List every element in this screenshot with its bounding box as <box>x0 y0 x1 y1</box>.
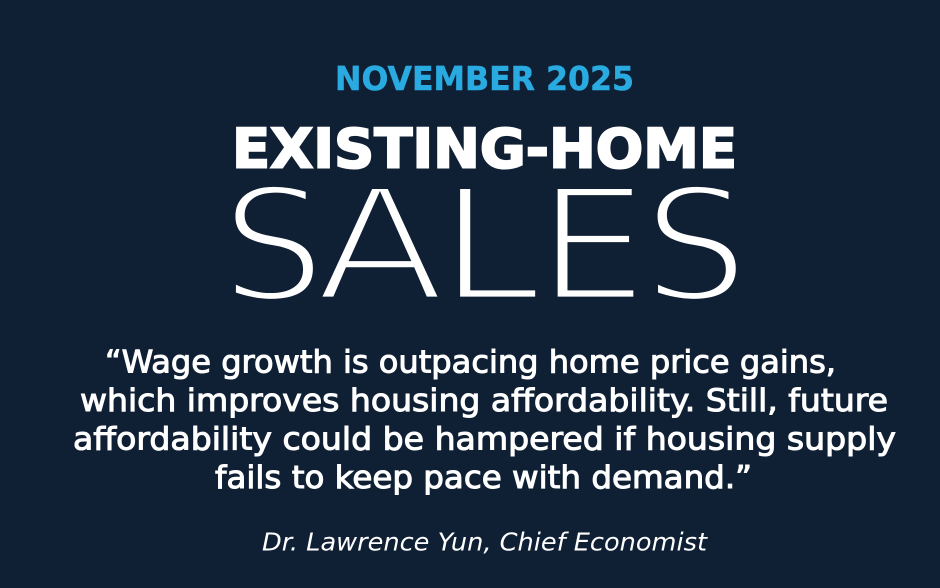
title: sales <box>221 155 749 338</box>
title: sales: A <box>315 155 445 338</box>
title: sales: S <box>643 155 749 338</box>
title: sales: S <box>221 155 326 337</box>
quote text: which improves housing affordability. Still, future <box>80 383 888 419</box>
quote text: fails to keep pace with demand.” <box>215 460 752 496</box>
attribution: Dr. Lawrence Yun, Chief Economist <box>262 528 708 556</box>
title: sales: E <box>536 155 648 337</box>
title: existing-home: EXISTING-HOME <box>232 118 737 180</box>
quote text: affordability could be hampered if housing supply <box>73 422 896 458</box>
date heading: NOVEMBER 2025 <box>335 59 634 98</box>
quote text <box>73 344 896 496</box>
quote text: “Wage growth is outpacing home price gains, <box>105 344 836 380</box>
title: sales: L <box>438 155 540 338</box>
